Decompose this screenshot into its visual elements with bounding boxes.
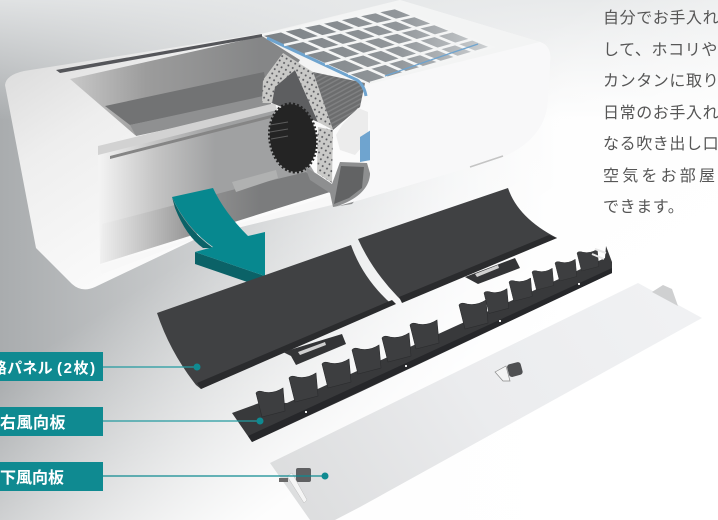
white slots xyxy=(592,249,606,259)
white vane xyxy=(270,283,702,520)
top edge slit xyxy=(56,34,262,73)
perforated filter strips xyxy=(262,53,333,130)
drain pan xyxy=(305,162,372,207)
small holes xyxy=(305,283,580,413)
lower dark recess xyxy=(100,172,330,264)
fan xyxy=(265,101,321,175)
label: airflow panels xyxy=(0,352,200,381)
arrow xyxy=(172,188,265,288)
louver bar xyxy=(232,246,612,442)
left bracket xyxy=(279,468,311,503)
interior upper wall xyxy=(70,36,300,135)
lattice xyxy=(262,8,492,83)
blue filter edge xyxy=(267,38,366,96)
body text: して、ホコリや xyxy=(603,41,718,59)
louver fins xyxy=(256,249,599,417)
right airflow panel xyxy=(358,188,557,301)
white electrical parts xyxy=(336,108,368,155)
body text: 日常のお手入れ xyxy=(603,104,718,122)
body text xyxy=(603,9,718,216)
dark panels xyxy=(157,188,557,389)
filter lattice cells xyxy=(262,8,492,83)
white front panel right xyxy=(335,42,550,207)
body text: カンタンに取り xyxy=(603,72,718,90)
top plane white rim xyxy=(262,0,540,85)
body text: 空気をお部屋 xyxy=(603,167,718,185)
blue lattice accents xyxy=(385,44,478,76)
body text: なる吹き出し口 xyxy=(603,135,718,153)
left airflow panel xyxy=(157,245,392,389)
heat exchanger coil xyxy=(313,72,365,130)
label: left-right louver xyxy=(0,407,264,436)
center bracket xyxy=(495,361,523,381)
hinge detail xyxy=(232,170,278,192)
left panel handle xyxy=(283,334,346,365)
air conditioner unit xyxy=(5,0,550,289)
label: airflow panels: (2枚) xyxy=(57,359,97,377)
right panel handle xyxy=(465,258,520,284)
unit body silhouette xyxy=(5,0,550,289)
body text: 自分でお手入れ xyxy=(603,9,718,27)
rail xyxy=(98,103,277,155)
body text: できます。 xyxy=(603,198,684,216)
label: up-down vane xyxy=(0,462,328,491)
interior lower wall xyxy=(98,107,325,262)
white lower lip xyxy=(100,195,336,274)
right bracket xyxy=(652,285,678,306)
